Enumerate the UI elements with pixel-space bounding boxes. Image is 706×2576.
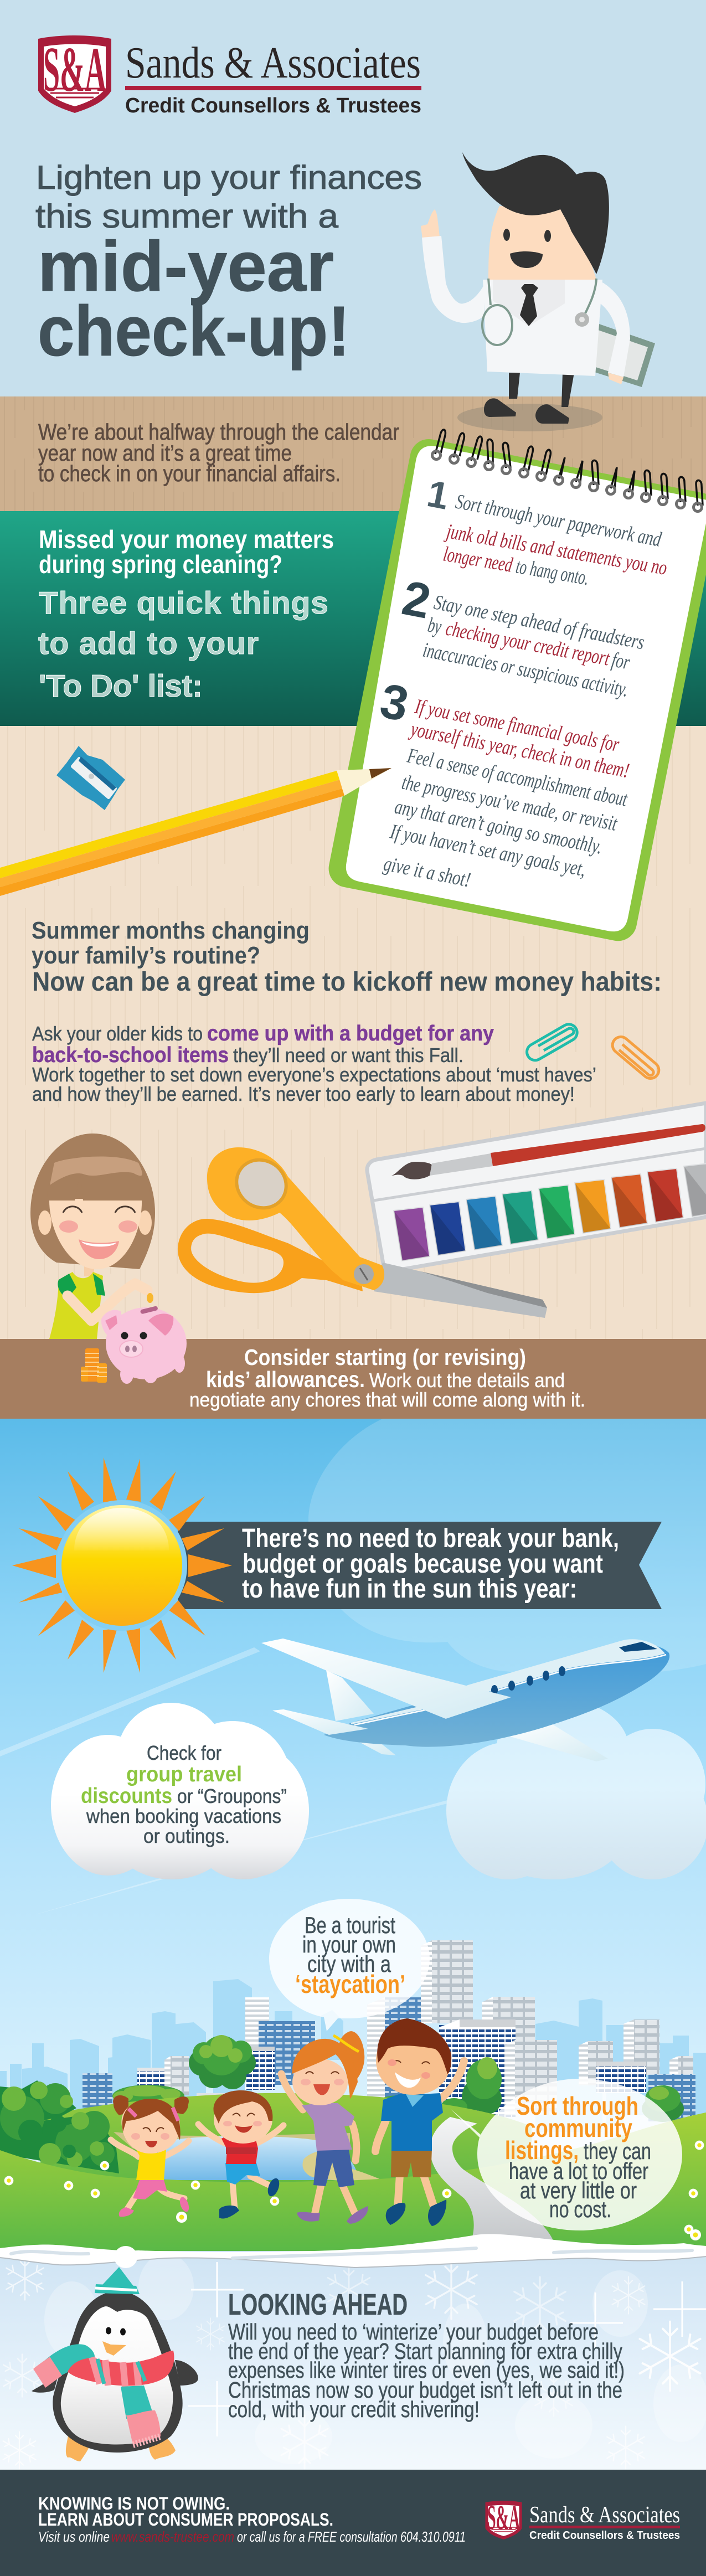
snow ridge: [0, 2234, 706, 2268]
chalk heading: [38, 585, 328, 704]
notebook: [326, 430, 706, 944]
footer logo: [485, 2499, 680, 2542]
hills: [40, 2093, 706, 2193]
illustration: doctor: [421, 152, 655, 431]
icon: coin stacks: [81, 1348, 107, 1383]
note item 2: by: [426, 614, 444, 638]
spiral binding: [432, 430, 703, 512]
note item 1: 1: [424, 472, 452, 518]
band text: negotiate any chores that will come along with it.: [189, 1388, 585, 1411]
speech bubble: community listings: no cost.: [549, 2196, 611, 2222]
cloud: travel tip: or “Groupons”: [177, 1785, 287, 1807]
family: dad: [375, 2018, 464, 2226]
panel: dark wood intro: [0, 396, 706, 511]
icon: sun: [12, 1457, 662, 1673]
banner text: budget or goals because you want: [243, 1549, 603, 1579]
note item 2: [398, 570, 646, 702]
skyline: far silhouettes: [0, 1979, 706, 2132]
cloud: pale right: [446, 1700, 706, 1879]
logo: Sands & Associates: [38, 34, 421, 117]
title: this summer with a: [35, 198, 339, 235]
speech bubble: community listings: listings,: [505, 2136, 579, 2165]
trees and bushes: [112, 2035, 684, 2122]
pond: [114, 2132, 382, 2181]
note item 3: If you set some financial goals for: [413, 694, 621, 756]
note item 3: yourself this year, check in on them!: [407, 717, 631, 782]
cloud: travel tip: Check for: [147, 1742, 221, 1764]
text: looking ahead: cold, with your credit shivering!: [228, 2397, 480, 2422]
cloud: travel tip: or outings.: [143, 1825, 230, 1847]
footer logo: Credit Counsellors & Trustees: [529, 2529, 680, 2542]
band text: kids’ allowances.: [206, 1367, 365, 1392]
banner text: [242, 1524, 619, 1604]
band text: Consider starting (or revising): [244, 1344, 526, 1370]
note item 2: for: [610, 648, 632, 674]
cloud: travel tip: when booking vacations: [86, 1805, 281, 1827]
decor: big pale cloud: [308, 1419, 706, 1675]
text: looking ahead: Christmas now so your budget isn’t left out in the: [228, 2377, 622, 2403]
note item 2: Stay one step ahead of fraudsters: [432, 591, 646, 654]
skyline: buildings: [83, 1940, 695, 2121]
title: [35, 159, 422, 371]
band text: [189, 1344, 585, 1411]
speech bubble: community listings: [450, 2079, 682, 2230]
footer text: www.sands-trustee.com: [111, 2528, 234, 2545]
text: looking ahead: [228, 2288, 625, 2422]
intro text: to check in on your financial affairs.: [38, 461, 341, 486]
chalk heading: to add to your: [38, 626, 259, 661]
note item 3: 3: [376, 673, 413, 731]
heading: summer months: Now can be a great time to kickoff new money habits:: [32, 967, 662, 997]
cloud: travel tip: [51, 1703, 309, 1879]
chalk heading: Three quick things: [39, 585, 328, 621]
speech bubble: staycation: [269, 1899, 430, 2031]
text: budget advice: [32, 1022, 596, 1105]
banner heading: [39, 525, 334, 579]
family: girl: [111, 2095, 190, 2217]
text: budget advice: and how they’ll be earned. It’s never too early to learn about money!: [32, 1083, 575, 1105]
title: mid-year: [38, 227, 334, 306]
note item 2: 2: [398, 570, 435, 629]
speech bubble: community listings: community: [524, 2114, 632, 2142]
panel: winter background: [0, 2251, 706, 2470]
illustration: penguin: [32, 2246, 198, 2461]
chalk heading: 'To Do' list:: [39, 668, 203, 704]
banner heading: during spring cleaning?: [39, 550, 282, 579]
footer logo: S&A: [487, 2499, 520, 2537]
road: [430, 2117, 556, 2248]
text: budget advice: come up with a budget for any: [207, 1022, 494, 1045]
icon: sharpener: [56, 746, 125, 810]
banner text: to have fun in the sun this year:: [242, 1574, 577, 1604]
text: looking ahead: LOOKING AHEAD: [228, 2288, 408, 2321]
icon: teal paper clip: [524, 1021, 580, 1063]
logo: Sands & Associates: Credit Counsellors & Trustees: [125, 94, 421, 117]
banner heading: Missed your money matters: [39, 525, 334, 554]
icon: pencil: [0, 768, 391, 896]
note item 1: [424, 472, 669, 590]
cloud: travel tip: discounts: [81, 1784, 172, 1808]
footer text: Visit us online: [38, 2528, 110, 2545]
text: budget advice: they’ll need or want this Fall.: [233, 1044, 463, 1067]
panel: allowance band: [0, 1339, 706, 1419]
cloud: travel tip: group travel: [126, 1763, 242, 1786]
note item 3: give it a shot!: [382, 852, 472, 892]
title: check-up!: [38, 292, 350, 371]
text: budget advice: back-to-school items: [32, 1043, 229, 1067]
bushes: left grove: [0, 2080, 119, 2173]
title: Lighten up your finances: [36, 159, 422, 196]
contrail: lower: [34, 1761, 597, 1915]
family: mom: [281, 2031, 368, 2224]
icon: orange paper clip: [609, 1033, 662, 1082]
foreground grass: [0, 2113, 706, 2256]
speech bubble: staycation: ‘staycation’: [295, 1970, 405, 1998]
speech bubble: community listings: at very little or: [520, 2177, 637, 2203]
note item 3: [376, 673, 631, 892]
illustration: girl with piggy bank: [30, 1134, 187, 1384]
speech bubble: community listings: they can: [584, 2138, 651, 2164]
band text: Work out the details and: [369, 1369, 565, 1392]
panel: teal to-do banner: [0, 511, 706, 726]
footer text: or call us for a FREE consultation 604.310.0911: [237, 2528, 466, 2545]
icon: scissors: [178, 1147, 547, 1318]
note item 3: any that aren’t going so smoothly.: [393, 795, 604, 859]
intro text: We’re about halfway through the calendar: [38, 419, 399, 445]
heading: summer months: your family’s routine?: [32, 942, 260, 969]
note item 1: longer need: [441, 542, 514, 577]
daisies: [4, 2141, 704, 2240]
note item 3: If you haven’t set any goals yet,: [388, 820, 588, 882]
speech bubble: community listings: have a lot to offer: [509, 2158, 648, 2184]
panel: summer sky: [0, 1419, 706, 2194]
panel: light wood: [0, 726, 706, 1339]
speech bubble: staycation: Be a tourist: [305, 1912, 395, 1938]
note item 1: to hang onto.: [514, 555, 591, 590]
footer text: [38, 2493, 466, 2545]
contrail: upper: [0, 1647, 260, 1756]
speech bubble: community listings: Sort through: [517, 2091, 638, 2120]
family: boy: [198, 2090, 284, 2219]
footer text: KNOWING IS NOT OWING.: [38, 2493, 230, 2513]
logo: Sands & Associates: Sands & Associates: [125, 39, 421, 87]
intro text: year now and it’s a great time: [38, 440, 292, 466]
panel: footer: [0, 2470, 706, 2576]
speech bubble: staycation: in your own: [302, 1931, 396, 1957]
text: looking ahead: Will you need to ‘winterize’ your budget before: [228, 2319, 599, 2345]
note item 2: checking your credit report: [444, 617, 612, 671]
panel: header sky: [0, 0, 706, 396]
note item 3: the progress you’ve made, or revisit: [400, 771, 620, 836]
text: budget advice: Work together to set down everyone’s expectations about ‘must haves’: [32, 1063, 596, 1086]
logo: Sands & Associates: S&A: [43, 34, 106, 105]
speech bubble: staycation: city with a: [307, 1951, 391, 1977]
footer text: LEARN ABOUT CONSUMER PROPOSALS.: [38, 2510, 333, 2529]
text: budget advice: Ask your older kids to: [32, 1022, 203, 1045]
banner text: There’s no need to break your bank,: [242, 1524, 619, 1553]
heading: summer months: [32, 917, 662, 997]
intro text: [38, 419, 399, 486]
icon: paint palette: [367, 1103, 706, 1271]
heading: summer months: Summer months changing: [32, 917, 310, 944]
icon: airplane: [261, 1639, 669, 1761]
